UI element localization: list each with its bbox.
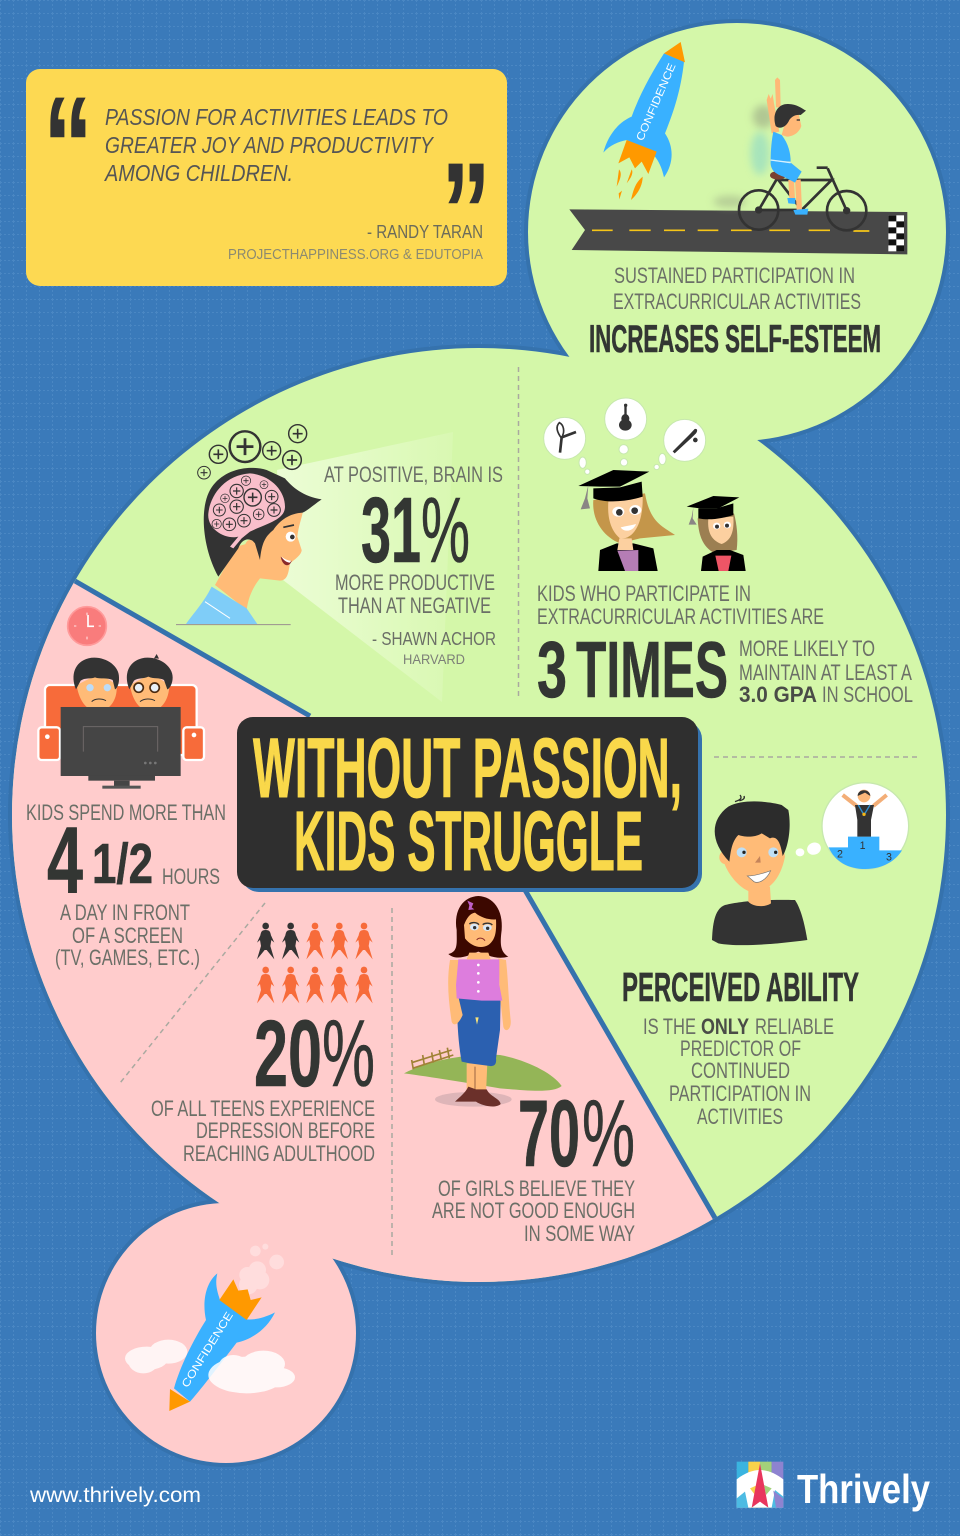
dashed separators: [120, 367, 921, 1256]
road: [569, 209, 907, 254]
stat: screen time: [26, 800, 226, 970]
opening quote mark: “: [43, 67, 93, 224]
illustration: happy brain boy: [176, 425, 322, 625]
stat: 31% more productive: AT POSITIVE, BRAIN IS: [324, 462, 503, 487]
stat: 20% depression: %: [322, 1001, 375, 1107]
stat: 70% of girls: ARE NOT GOOD ENOUGH: [432, 1198, 635, 1223]
illustration: boy on bicycle: [713, 77, 866, 230]
quote text: PASSION FOR ACTIVITIES LEADS TO: [105, 104, 448, 130]
stat: 3 times: 3.0 GPA: [739, 682, 817, 707]
quote attribution: - RANDY TARAN: [367, 222, 483, 242]
icon: people pictogram: [257, 923, 373, 1003]
quote attribution: [228, 222, 483, 263]
icon: rising rocket: CONFIDENCE: [634, 62, 679, 143]
stat: screen time: 4: [47, 808, 83, 914]
text: sustained participation: SUSTAINED PARTICIPATION IN: [614, 263, 855, 288]
stat: screen time: OF A SCREEN: [72, 923, 183, 948]
closing quote mark: ”: [441, 133, 491, 290]
quote text: AMONG CHILDREN.: [103, 160, 293, 186]
illustration: smiling boy with podium thought: 1: [860, 840, 866, 852]
stat: 20% depression: 20: [254, 1001, 322, 1107]
icon: falling rocket: CONFIDENCE: [180, 1310, 236, 1390]
stat: 20% depression: [151, 1001, 375, 1166]
quote text: [103, 104, 448, 186]
stat: 20% depression: OF ALL TEENS EXPERIENCE: [151, 1096, 375, 1121]
text: sustained participation: [613, 263, 861, 314]
stat: 3 times: KIDS WHO PARTICIPATE IN: [537, 581, 751, 606]
footer url: www.thrively.com: [29, 1484, 201, 1507]
icon: falling rocket: [125, 1244, 295, 1411]
illustration: smiling boy with podium thought: 2: [837, 848, 843, 860]
light beam: [277, 432, 453, 702]
quote panel: [26, 67, 507, 290]
stat: 70% of girls: OF GIRLS BELIEVE THEY: [438, 1176, 635, 1201]
stat: screen time: A DAY IN FRONT: [60, 900, 190, 925]
illustration: clock: [68, 607, 106, 645]
illustration: smiling boy with podium thought: [712, 783, 909, 945]
text: perceived ability: PARTICIPATION IN: [669, 1081, 811, 1106]
text: perceived ability: ACTIVITIES: [697, 1104, 783, 1129]
text: perceived ability: ONLY: [701, 1014, 749, 1039]
stat: 31% more productive: %: [421, 478, 470, 582]
stat: 3 times: TIMES: [576, 625, 728, 714]
stat: 3 times: IN SCHOOL: [822, 682, 913, 707]
stat: screen time: 1/2: [92, 832, 153, 896]
stat: 20% depression: REACHING ADULTHOOD: [183, 1141, 375, 1166]
icon: rising rocket: [603, 42, 685, 200]
stat: 31% more productive: [324, 462, 503, 667]
logo: Thrively: [737, 1462, 930, 1512]
stat: 70% of girls: [432, 1081, 635, 1246]
stat: 70% of girls: 70: [518, 1081, 580, 1187]
stat: 70% of girls: %: [582, 1081, 635, 1187]
stat: 31% more productive: - SHAWN ACHOR: [372, 629, 496, 649]
text: perceived ability: [622, 964, 859, 1129]
stat: screen time: HOURS: [162, 864, 220, 889]
text: perceived ability: IS THE: [643, 1014, 696, 1039]
illustration: graduates with thought bubbles: [544, 398, 746, 571]
heading panel: without passion: [237, 717, 702, 892]
text: perceived ability: CONTINUED: [691, 1058, 790, 1083]
quote attribution: PROJECTHAPPINESS.ORG & EDUTOPIA: [228, 247, 483, 263]
illustration: kids on couch watching TV: [38, 654, 204, 789]
stat: 31% more productive: HARVARD: [403, 651, 465, 667]
stat: 31% more productive: 31: [361, 478, 421, 582]
quote text: GREATER JOY AND PRODUCTIVITY: [105, 132, 434, 158]
illustration: sad girl on hill: [404, 896, 562, 1107]
stat: 3 times: 3: [537, 625, 567, 714]
stat: screen time: (TV, GAMES, ETC.): [55, 945, 200, 970]
stat: 3 times: [537, 581, 913, 714]
stat: 70% of girls: IN SOME WAY: [524, 1221, 635, 1246]
text: perceived ability: PREDICTOR OF: [680, 1036, 801, 1061]
text: sustained participation: EXTRACURRICULAR ACTIVITIES: [613, 289, 861, 314]
logo icon: [737, 1462, 783, 1508]
logo wordmark: Thrively: [797, 1466, 930, 1512]
stat: 31% more productive: THAN AT NEGATIVE: [338, 593, 491, 618]
illustration: smiling boy with podium thought: 3: [886, 852, 892, 864]
stat: 31% more productive: MORE PRODUCTIVE: [335, 570, 495, 595]
stat: 3 times: EXTRACURRICULAR ACTIVITIES ARE: [537, 604, 824, 629]
stat: screen time: KIDS SPEND MORE THAN: [26, 800, 226, 825]
text: perceived ability: RELIABLE: [755, 1014, 834, 1039]
stat: 3 times: MORE LIKELY TO: [739, 636, 875, 661]
stat: 20% depression: DEPRESSION BEFORE: [196, 1118, 375, 1143]
